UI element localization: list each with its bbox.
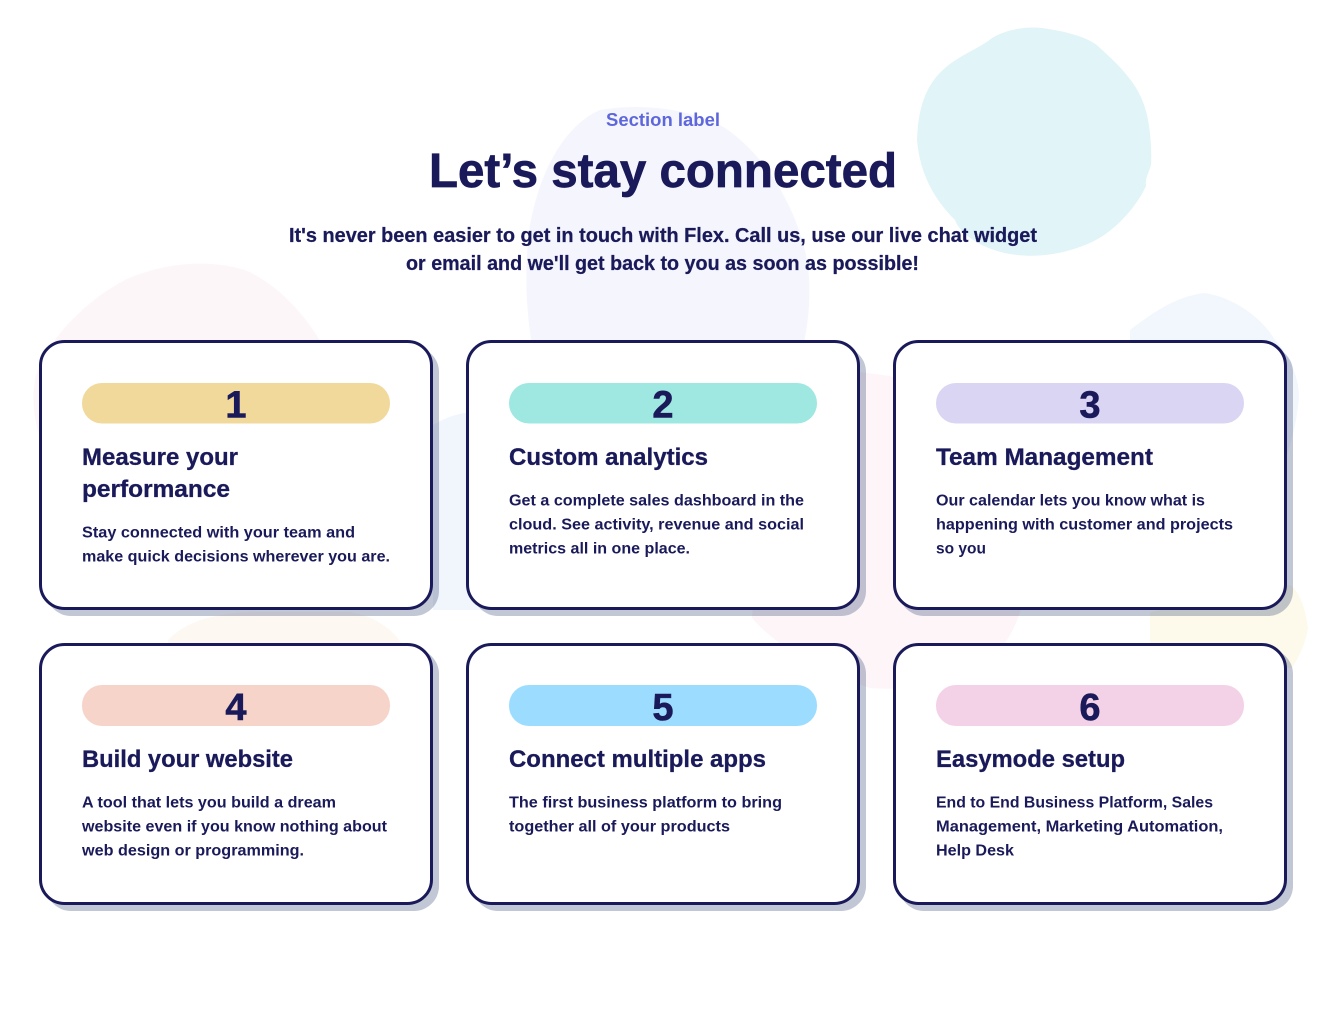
- panel: card 1: make quick decisions wherever you are.: [82, 548, 390, 566]
- panel: card 2: Custom analytics: [509, 444, 708, 471]
- panel: card 4: A tool that lets you build a dream: [82, 794, 336, 812]
- panel: card 1: Measure your: [82, 444, 238, 471]
- panel: card 3: [894, 342, 1293, 616]
- panel: card 2: cloud. See activity, revenue and social: [509, 516, 804, 534]
- panel: card 6: 6: [1079, 687, 1101, 729]
- panel: card 3: so you: [936, 540, 986, 558]
- panel: card 3: 3: [1079, 384, 1101, 426]
- panel: card 4: Build your website: [82, 746, 293, 773]
- panel: card 6: Management, Marketing Automation,: [936, 818, 1223, 836]
- panel: card 4: web design or programming.: [81, 842, 304, 860]
- panel: card 5: [468, 644, 866, 911]
- section label: Section label: [606, 110, 720, 130]
- panel: card 5: Connect multiple apps: [509, 746, 766, 773]
- panel: card 6: Help Desk: [936, 842, 1014, 860]
- panel: card 2: [468, 342, 866, 616]
- panel: card 2: metrics all in one place.: [509, 540, 690, 558]
- title: Let’s stay connected: [429, 145, 897, 198]
- panel: card 4: 4: [225, 687, 247, 729]
- intro text: [289, 225, 1037, 275]
- panel: card 4: website even if you know nothing about: [81, 818, 388, 836]
- panel: card 5: together all of your products: [509, 818, 730, 836]
- panel: card 3: Team Management: [936, 444, 1153, 471]
- panel: card 6: Easymode setup: [936, 746, 1125, 773]
- intro text: or email and we'll get back to you as soon as possible!: [406, 253, 919, 275]
- panel: card 5: The first business platform to bring: [509, 794, 782, 812]
- panel: card 2: Get a complete sales dashboard in the: [509, 492, 804, 510]
- panel: card 3: happening with customer and projects: [936, 516, 1233, 534]
- panel: card 6: End to End Business Platform, Sales: [936, 794, 1213, 812]
- panel: card 5: 5: [652, 687, 674, 729]
- panel: card 4: [40, 644, 439, 911]
- panel: card 2: 2: [652, 384, 674, 426]
- panel: card 1: [40, 342, 439, 616]
- panel: card 3: Our calendar lets you know what is: [936, 492, 1205, 510]
- panel: card 6: [894, 644, 1293, 911]
- panel: card 1: performance: [82, 476, 230, 503]
- intro text: It's never been easier to get in touch with Flex. Call us, use our live chat widget: [289, 225, 1037, 247]
- background watercolor blobs: [33, 27, 1308, 720]
- panel: card 1: 1: [225, 384, 247, 426]
- panel: card 1: Stay connected with your team and: [82, 524, 355, 542]
